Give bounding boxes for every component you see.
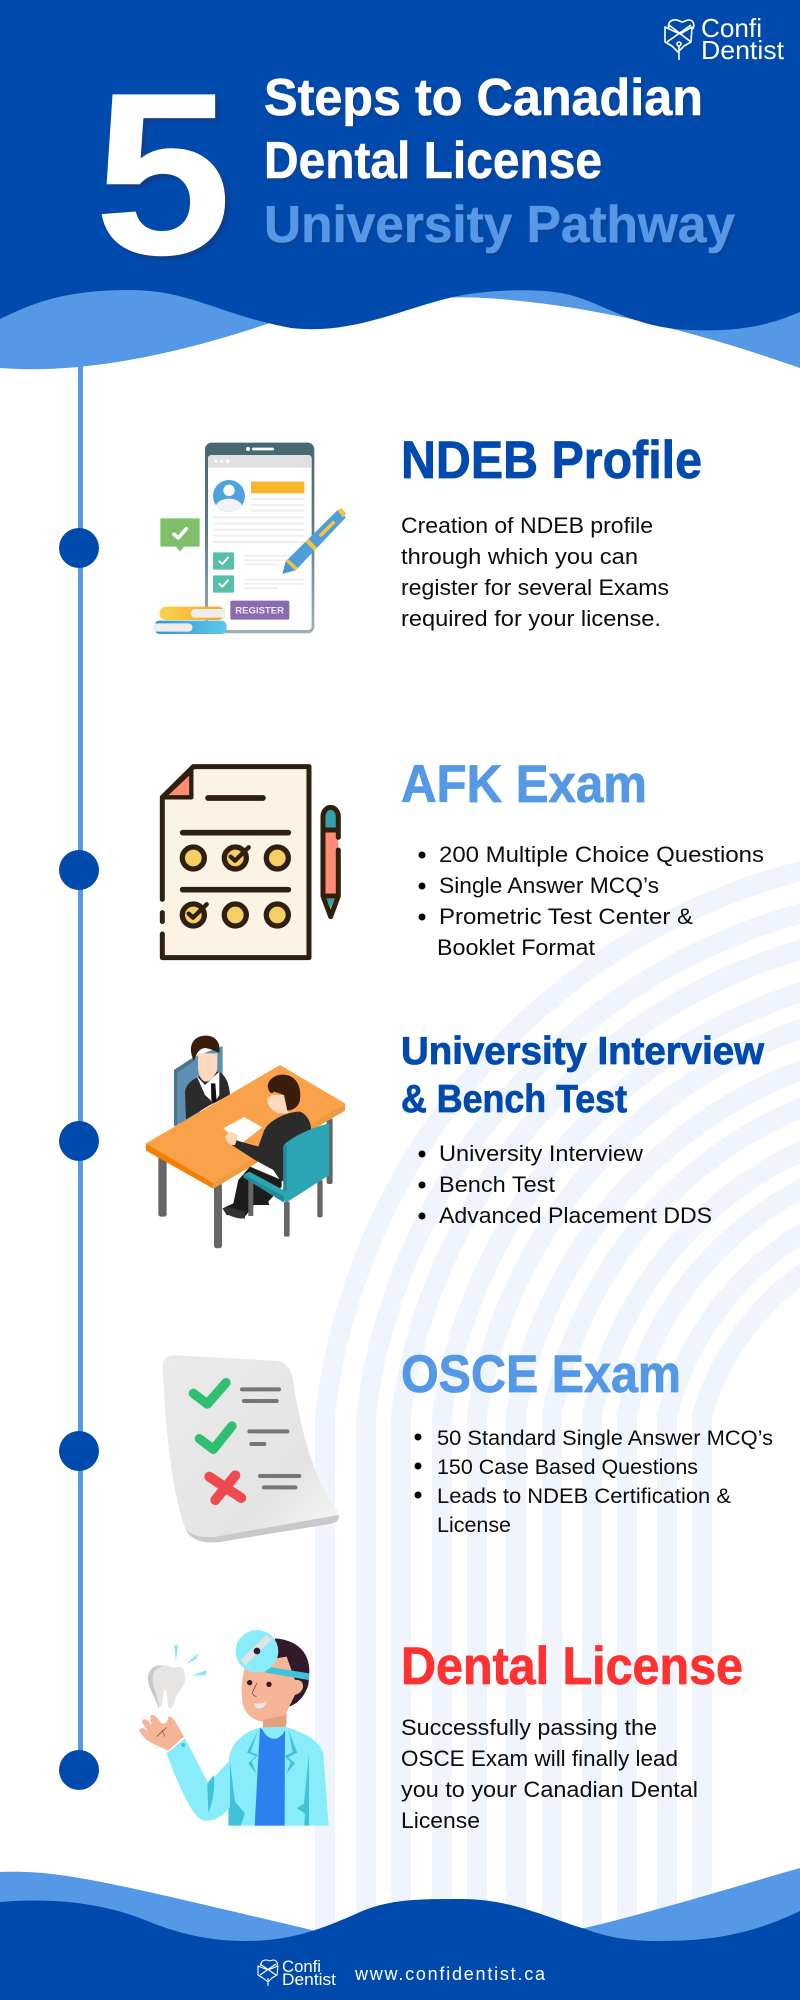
logo: top right: Dentist <box>701 35 785 65</box>
title line 2: Dental License <box>264 132 602 190</box>
step 3 marker <box>59 1121 99 1161</box>
step 5 marker <box>59 1750 99 1790</box>
logo: top right <box>665 13 785 65</box>
title line 3: University Pathway <box>264 196 735 254</box>
list: university steps: University Interview <box>439 1141 643 1166</box>
title number 5: 5 <box>94 45 232 304</box>
footer logo wordmark: Confi <box>282 1957 321 1976</box>
footer website: www.confidentist.ca <box>354 1964 546 1984</box>
heading: OSCE Exam: OSCE Exam <box>401 1345 681 1404</box>
list: AFK details: 200 Multiple Choice Questions <box>439 842 764 867</box>
timeline line <box>78 365 83 1770</box>
icon: exam sheet and pencil <box>162 767 338 958</box>
list: university steps <box>418 1141 712 1228</box>
text: NDEB description: through which you can <box>401 544 638 569</box>
footer wave: light blue <box>0 1868 800 2000</box>
list: AFK details <box>418 842 764 960</box>
text: NDEB description: Creation of NDEB profile <box>401 513 653 538</box>
list: university steps: Advanced Placement DDS <box>439 1203 712 1228</box>
footer logo <box>258 1957 336 1989</box>
step 4 marker <box>59 1431 99 1471</box>
icon: interview at a desk <box>146 1036 345 1248</box>
logo wordmark: Confi <box>701 13 762 43</box>
icon: dentist holding a tooth <box>139 1630 329 1826</box>
text: Dental License description: OSCE Exam will finally lead <box>401 1746 678 1771</box>
text: Dental License description: you to your Canadian Dental <box>401 1777 698 1802</box>
text: NDEB description <box>401 513 669 631</box>
list: OSCE details: Leads to NDEB Certification & <box>437 1485 731 1508</box>
list: OSCE details: License <box>437 1514 511 1537</box>
icon: phone registration form <box>154 443 346 634</box>
text: NDEB description: required for your license. <box>401 606 661 631</box>
heading: AFK Exam: AFK Exam <box>401 755 647 814</box>
text: NDEB description: register for several Exams <box>401 575 669 600</box>
heading: University Interview and Bench Test: University Interview <box>401 1030 765 1073</box>
text: Dental License description: License <box>401 1808 480 1833</box>
icon: phone registration form: REGISTER <box>235 606 284 616</box>
step 2 marker <box>59 850 99 890</box>
list: OSCE details: 50 Standard Single Answer MCQ’s <box>437 1427 773 1450</box>
list: OSCE details: 150 Case Based Questions <box>437 1456 698 1479</box>
footer wave: dark blue <box>0 1899 800 2000</box>
icon: 3D checklist <box>163 1355 339 1542</box>
footer logo: Dentist <box>282 1970 336 1989</box>
list: AFK details: Single Answer MCQ’s <box>439 873 659 898</box>
timeline <box>59 365 99 1790</box>
footer logo icon <box>258 1960 278 1986</box>
heading: University Interview and Bench Test <box>401 1030 765 1121</box>
background arches <box>325 851 800 1960</box>
heading: NDEB Profile: NDEB Profile <box>401 431 702 490</box>
list: university steps: Bench Test <box>439 1172 555 1197</box>
list: AFK details: Booklet Format <box>437 935 595 960</box>
header wave: light blue <box>0 250 800 369</box>
text: Dental License description <box>401 1715 698 1833</box>
logo icon <box>665 20 694 60</box>
title line 1: Steps to Canadian <box>264 69 703 127</box>
pen <box>282 508 346 574</box>
heading: University Interview and Bench Test: & Bench Test <box>401 1078 627 1121</box>
text: Dental License description: Successfully passing the <box>401 1715 657 1740</box>
heading: Dental License: Dental License <box>401 1637 743 1696</box>
list: AFK details: Prometric Test Center & <box>439 904 693 929</box>
step 1 marker <box>59 528 99 568</box>
list: OSCE details <box>414 1427 773 1537</box>
header wave: dark blue <box>0 0 800 330</box>
